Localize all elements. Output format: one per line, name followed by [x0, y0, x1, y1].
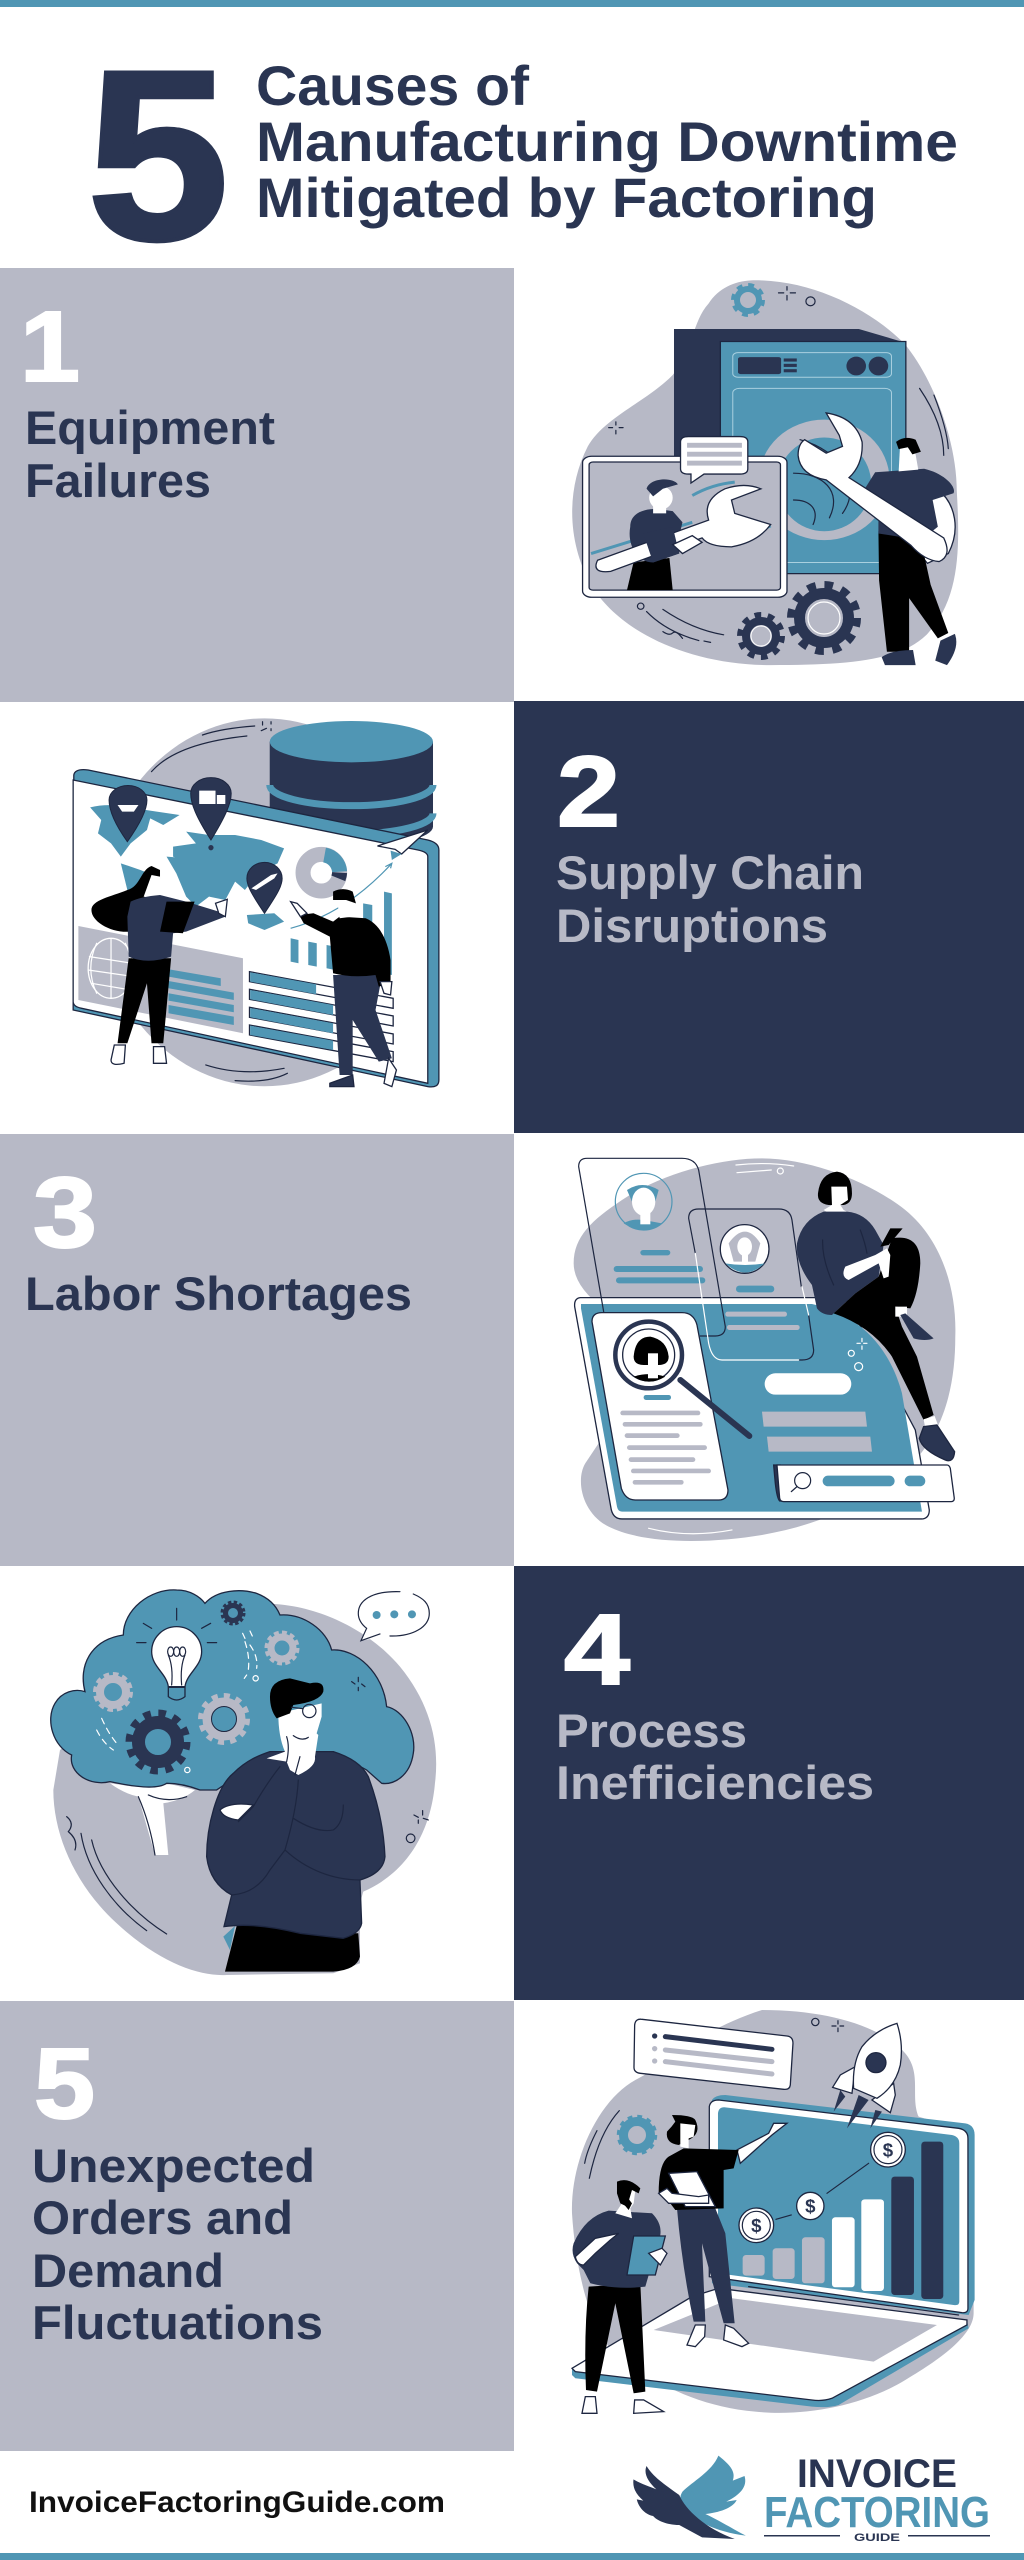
machine [674, 329, 906, 574]
panel 1: equipment failures [0, 268, 514, 702]
search bar [774, 1465, 954, 1502]
donut chart [303, 854, 340, 891]
bottom accent bar [0, 2553, 1024, 2560]
logo wordmark: INVOICE [797, 2452, 957, 2496]
dollar coins: $ [805, 2196, 816, 2217]
light bulb [137, 1608, 217, 1700]
resume card [592, 1313, 728, 1500]
dollar coins: $ [751, 2215, 762, 2236]
heading: Process Inefficiencies: Inefficiencies [556, 1756, 874, 1809]
man body [863, 438, 956, 665]
growth arrow and paper plane [291, 830, 428, 928]
tablet [575, 1298, 929, 1519]
heading: Unexpected Orders and Demand Fluctuations: Orders and [32, 2191, 293, 2244]
speech bubble [358, 1591, 430, 1641]
logo eagle [633, 2456, 746, 2539]
logo wordmark: GUIDE [854, 2532, 900, 2544]
heading: Supply Chain Disruptions [556, 846, 864, 952]
title text: Manufacturing Downtime [256, 110, 958, 173]
man pointing at dashboard [291, 889, 396, 1087]
heading: Supply Chain Disruptions: Disruptions [556, 899, 828, 952]
note card [634, 2019, 793, 2089]
number 4: 4 [564, 1594, 630, 1706]
number 3: 3 [33, 1157, 97, 1269]
title text [256, 54, 958, 229]
seated woman [797, 1172, 955, 1461]
location pins [109, 778, 282, 913]
title [87, 21, 958, 291]
heading: Equipment Failures [25, 401, 275, 507]
laptop base [572, 2288, 969, 2407]
woman with laptop [91, 866, 227, 1064]
gears [95, 1602, 298, 1771]
heading: Process Inefficiencies [556, 1704, 874, 1809]
logo wordmark: FACTORING [764, 2488, 990, 2537]
thought cloud [51, 1590, 414, 1790]
rising bars [743, 2142, 943, 2299]
big wrench [798, 413, 947, 562]
teal gear [618, 2116, 656, 2154]
man with tablet [573, 2180, 667, 2413]
panel 2: supply chain disruptions [514, 701, 1024, 1133]
title text: Causes of [256, 54, 529, 117]
dashboard screen [73, 770, 439, 1087]
heading: Process Inefficiencies: Process [556, 1704, 747, 1757]
magnifying glass [615, 1322, 749, 1436]
heading: Labor Shortages: Labor Shortages [25, 1267, 412, 1320]
top accent bar [0, 0, 1024, 7]
panel 5: unexpected orders [0, 2001, 514, 2451]
laptop screen [709, 2095, 975, 2315]
number 2: 2 [557, 736, 620, 848]
heading: Equipment Failures: Failures [25, 454, 211, 507]
big numeral 5: 5 [87, 21, 229, 291]
heading: Unexpected Orders and Demand Fluctuations: Fluctuations [32, 2296, 323, 2349]
man [207, 1678, 385, 1972]
content blocks [762, 1373, 872, 1452]
database cylinder [270, 721, 433, 847]
dollar coins [739, 2132, 905, 2243]
progress bars [249, 972, 393, 1062]
illustration: global logistics dashboard [73, 718, 439, 1087]
world map [90, 805, 284, 930]
number 1: 1 [20, 291, 80, 403]
illustration: thinking man with idea tree [51, 1590, 436, 1975]
heading: Supply Chain Disruptions: Supply Chain [556, 846, 864, 899]
heading: Unexpected Orders and Demand Fluctuations: Demand [32, 2244, 224, 2297]
heading: Unexpected Orders and Demand Fluctuations: Unexpected [32, 2139, 315, 2192]
bar chart [291, 892, 392, 975]
panel 3: labor shortages [0, 1134, 514, 1566]
panel 4: process inefficiencies [514, 1566, 1024, 2000]
tree trunk [110, 1783, 195, 1855]
rocket [833, 2023, 901, 2128]
heading: Unexpected Orders and Demand Fluctuations [32, 2139, 323, 2349]
footer website: InvoiceFactoringGuide.com [29, 2486, 445, 2519]
speech bubble [681, 437, 748, 483]
illustration: laptop growth chart [572, 2010, 975, 2413]
dollar coins: $ [883, 2139, 894, 2160]
illustration: candidate search [574, 1158, 955, 1541]
grey info panel with globe [78, 926, 243, 1033]
title text: Mitigated by Factoring [256, 166, 877, 229]
video call frame [583, 456, 787, 597]
heading: Equipment Failures: Equipment [25, 401, 275, 454]
gears [734, 286, 857, 657]
logo wordmark [764, 2452, 990, 2544]
profile card glass 2 [689, 1209, 814, 1360]
profile card glass 1 [579, 1158, 725, 1336]
logo [633, 2452, 990, 2544]
number 5: 5 [34, 2028, 95, 2140]
illustration: washing machine repair [572, 280, 958, 665]
presenting woman [659, 2115, 787, 2347]
